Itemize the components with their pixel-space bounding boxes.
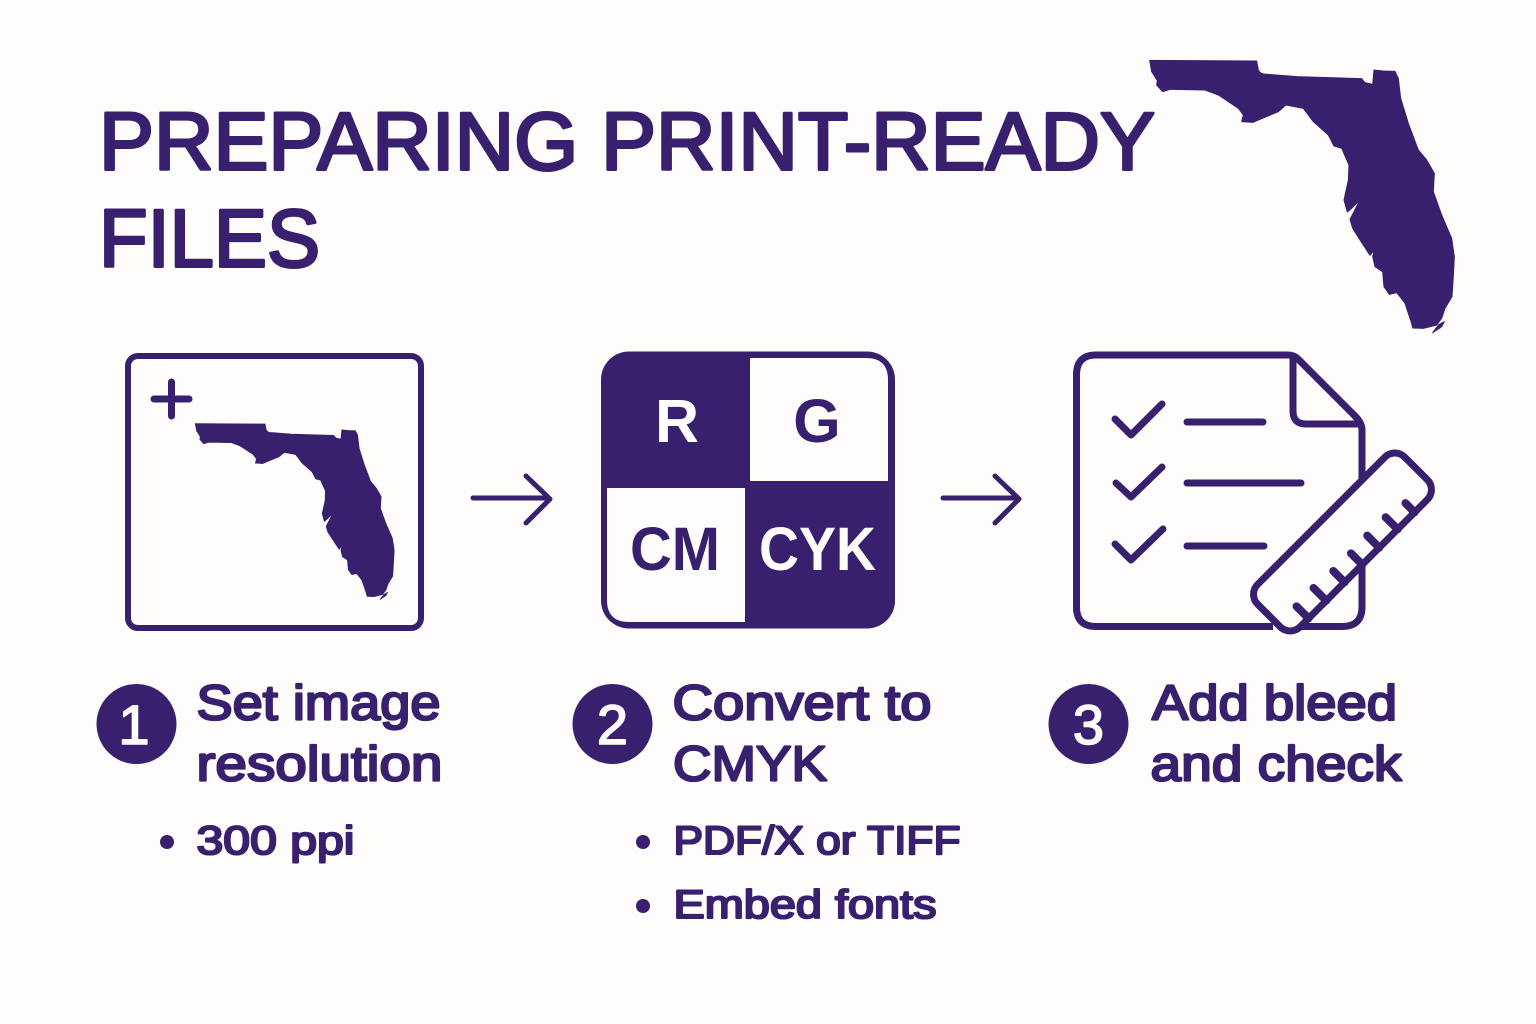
bullet text: 300 ppi [196, 819, 354, 863]
bullet text: Embed fonts [674, 883, 936, 927]
heading: Add bleed [1152, 676, 1397, 730]
panel: step 1 image icon [128, 356, 421, 628]
arrow: step 1 to step 2 [473, 476, 550, 523]
bullet text: PDF/X or TIFF [674, 819, 960, 863]
letters CYK: CYK [759, 515, 876, 583]
step 2 text: CMYK [673, 736, 827, 792]
document outline [1076, 355, 1362, 626]
number 1: 1 [118, 693, 150, 756]
title [99, 96, 1155, 284]
bullet [636, 835, 650, 849]
checklist ticks [1115, 404, 1163, 560]
letter G: G [793, 387, 841, 455]
bullet [636, 899, 650, 913]
step 3 text: and check [1150, 736, 1402, 792]
heading: Convert to [672, 676, 932, 730]
icon: Florida silhouette [1150, 60, 1454, 333]
step 3 text [1048, 676, 1402, 792]
G quadrant [750, 358, 888, 481]
title: PREPARING PRINT-READY [99, 96, 1155, 188]
number badge 1 [96, 684, 176, 764]
number badge 2 [572, 684, 652, 764]
page fold [1293, 356, 1362, 424]
checklist lines [1187, 422, 1301, 546]
CM quadrant [607, 488, 745, 622]
letters CM: CM [630, 515, 720, 583]
image frame [128, 356, 421, 628]
panel: step 3 checklist icon [1076, 355, 1437, 637]
number 3: 3 [1073, 693, 1104, 756]
bullet [160, 835, 174, 849]
step 1 text: resolution [196, 736, 442, 792]
icon: small Florida [195, 424, 394, 599]
title: FILES [99, 194, 320, 284]
icon: plus [154, 382, 189, 416]
heading: Set image [196, 676, 440, 730]
number 2: 2 [597, 693, 628, 756]
step 2 text [572, 676, 960, 927]
grid background [601, 352, 895, 628]
icon: ruler [1248, 447, 1437, 637]
letter R: R [655, 387, 699, 455]
step 1 text [96, 676, 442, 863]
arrow: step 2 to step 3 [943, 476, 1019, 523]
number badge 3 [1048, 684, 1128, 764]
panel: step 2 colour grid icon [601, 352, 895, 628]
